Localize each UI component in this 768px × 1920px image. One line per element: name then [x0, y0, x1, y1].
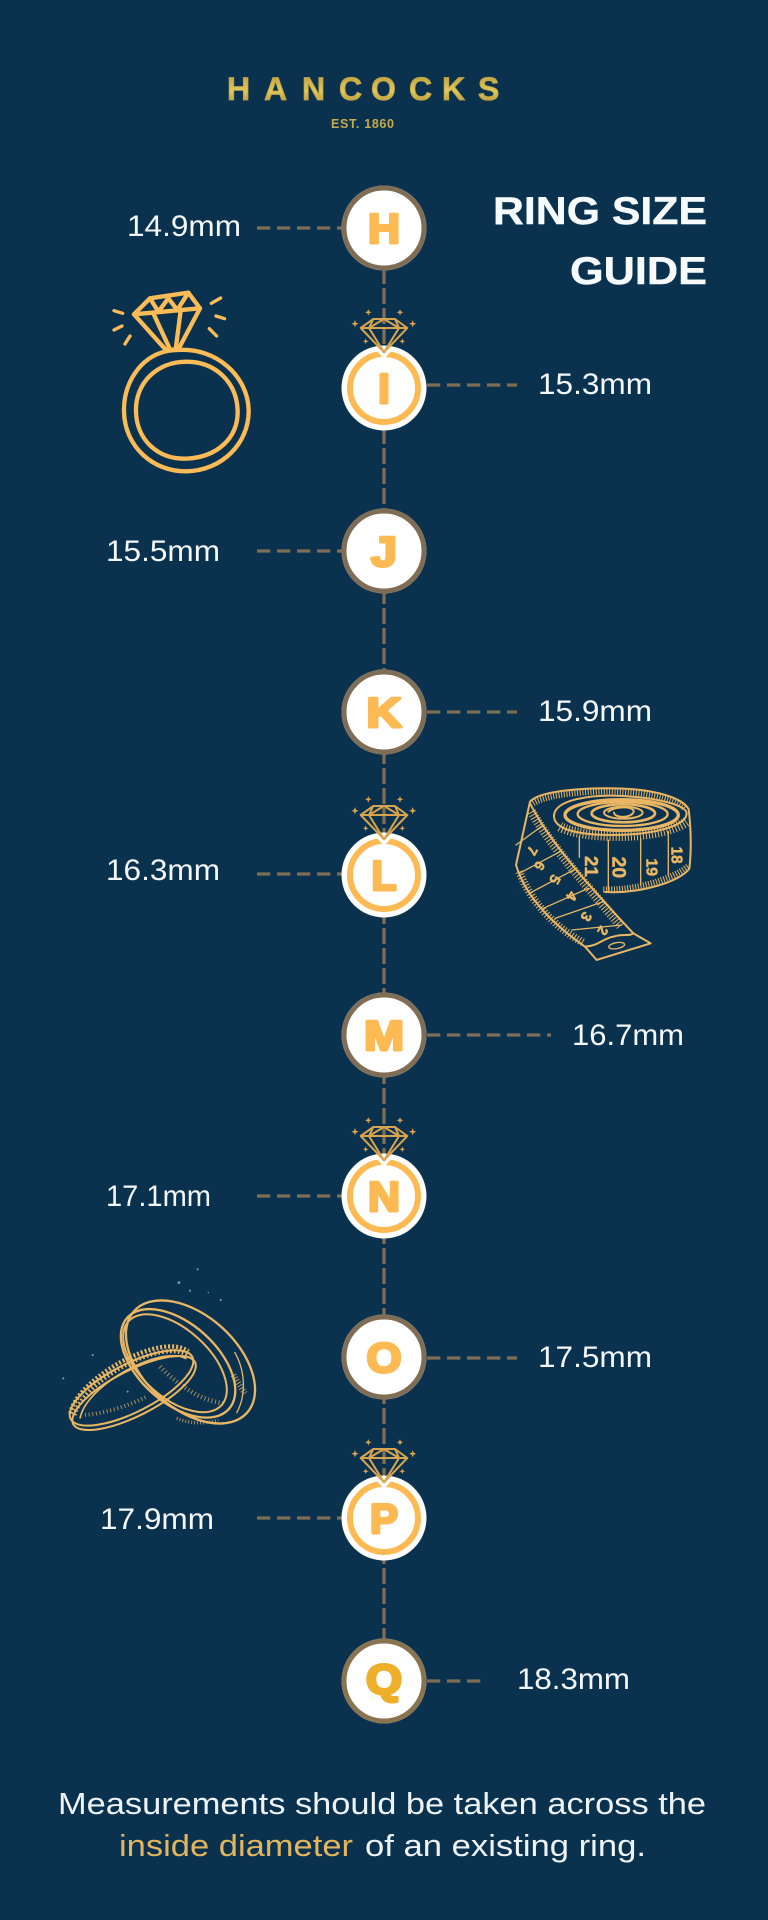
marker M with size: M	[364, 1012, 404, 1059]
marker K with size	[342, 670, 652, 754]
marker N with gem and size	[106, 1117, 426, 1238]
marker I with gem and size	[342, 309, 652, 430]
icon: wedding rings	[58, 1268, 278, 1449]
diamond band	[58, 1332, 205, 1444]
marker Q with size: 18.3mm	[517, 1663, 630, 1696]
tape numbers: 21	[581, 856, 602, 877]
tape numbers: 18	[668, 847, 685, 864]
tape numbers: 4	[561, 888, 580, 904]
icon: measuring tape	[516, 788, 691, 960]
wide band	[101, 1276, 278, 1449]
marker K with size: 15.9mm	[538, 695, 652, 728]
title	[493, 190, 707, 293]
marker J with size: J	[371, 528, 397, 575]
marker M with size: 16.7mm	[572, 1019, 684, 1052]
marker L with gem and size: L	[372, 852, 396, 899]
marker Q with size: Q	[366, 1656, 402, 1703]
marker H with size	[127, 186, 426, 270]
marker L with gem and size	[106, 796, 426, 918]
marker J with size: 15.5mm	[106, 535, 220, 568]
marker N with gem and size: 17.1mm	[106, 1180, 211, 1213]
title: RING SIZE	[493, 190, 707, 233]
icon: engagement ring	[114, 293, 249, 471]
marker I with gem and size: 15.3mm	[538, 368, 652, 401]
marker Q with size	[342, 1638, 630, 1724]
footer note	[58, 1786, 706, 1863]
sparkle dots	[62, 1268, 222, 1393]
footer note: inside diameter	[119, 1828, 353, 1863]
marker N with gem and size: N	[368, 1173, 400, 1220]
tape numbers: 6	[531, 858, 549, 873]
marker K with size: K	[366, 689, 402, 736]
tape numbers: 19	[643, 858, 660, 876]
marker M with size	[342, 992, 684, 1078]
marker P with gem and size: 17.9mm	[100, 1503, 214, 1536]
marker I with gem and size: I	[378, 365, 390, 412]
marker P with gem and size	[100, 1439, 426, 1560]
marker J with size	[106, 508, 426, 594]
tape numbers	[523, 843, 685, 938]
title: GUIDE	[570, 250, 707, 293]
tape numbers: 7	[523, 843, 541, 858]
tape numbers: 3	[576, 909, 594, 924]
strip	[516, 802, 585, 947]
marker H with size: H	[368, 205, 400, 252]
tape numbers: 2	[594, 923, 612, 938]
footer note: Measurements should be taken across the	[58, 1786, 706, 1821]
tab end	[585, 933, 651, 960]
marker O with size: O	[366, 1334, 402, 1381]
logo: Hancocks: HANCOCKS	[227, 71, 499, 107]
coil	[530, 788, 691, 892]
marker O with size	[342, 1314, 652, 1400]
marker P with gem and size: P	[370, 1495, 398, 1542]
marker L with gem and size: 16.3mm	[106, 854, 220, 887]
marker H with size: 14.9mm	[127, 210, 241, 243]
logo: Hancocks	[227, 71, 499, 131]
tape numbers: 20	[608, 857, 629, 878]
tape numbers: 5	[545, 871, 563, 886]
marker O with size: 17.5mm	[538, 1341, 652, 1374]
footer note: of an existing ring.	[365, 1828, 646, 1863]
logo: Hancocks: EST. 1860	[331, 117, 394, 131]
dashed vertical connector	[382, 228, 386, 1680]
